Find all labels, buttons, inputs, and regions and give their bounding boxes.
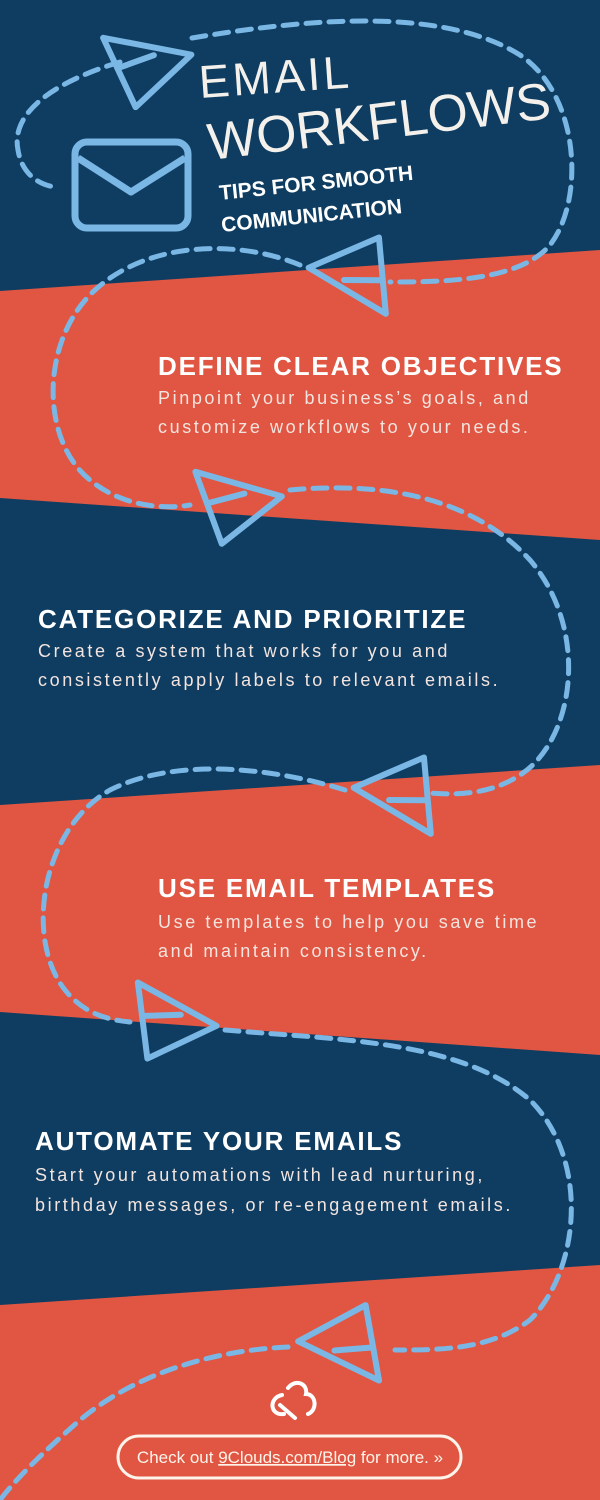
tip 1: define clear objectives: customize workflows to your needs. bbox=[158, 417, 531, 437]
tip 4: automate your emails: Start your automations with lead nurturing, bbox=[35, 1165, 485, 1185]
icon: paper plane 2 bbox=[303, 226, 399, 314]
tip 3: use email templates: USE EMAIL TEMPLATES bbox=[158, 873, 496, 903]
icon: paper plane 3 bbox=[195, 464, 286, 546]
tip 4: automate your emails: birthday messages, or re-engagement emails. bbox=[35, 1195, 513, 1215]
tip 2: categorize and prioritize: consistently apply labels to relevant emails. bbox=[38, 670, 500, 690]
subtitle bbox=[218, 162, 414, 237]
tip 1: define clear objectives: DEFINE CLEAR OBJECTIVES bbox=[158, 351, 563, 381]
tip 1: define clear objectives bbox=[158, 351, 563, 437]
footer button bbox=[118, 1436, 461, 1478]
tip 3: use email templates: and maintain consistency. bbox=[158, 941, 429, 961]
tip 2: categorize and prioritize: CATEGORIZE AND PRIORITIZE bbox=[38, 604, 467, 634]
logo bbox=[272, 1383, 315, 1418]
tip 4: automate your emails: AUTOMATE YOUR EMAILS bbox=[35, 1126, 403, 1156]
tip 2: categorize and prioritize bbox=[38, 604, 500, 690]
tip 3: use email templates: Use templates to help you save time bbox=[158, 912, 539, 932]
icon: envelope bbox=[75, 142, 188, 228]
icon: paper plane 6 bbox=[295, 1299, 386, 1381]
subtitle: COMMUNICATION bbox=[220, 195, 403, 237]
footer button: Check out 9Clouds.com/Blog for more. » bbox=[137, 1448, 443, 1467]
tip 3: use email templates bbox=[158, 873, 539, 961]
icon: paper plane 1 bbox=[103, 23, 199, 111]
title: EMAIL bbox=[197, 45, 353, 108]
subtitle: TIPS FOR SMOOTH bbox=[218, 162, 414, 205]
tip 4: automate your emails bbox=[35, 1126, 513, 1215]
tip 1: define clear objectives: Pinpoint your business’s goals, and bbox=[158, 388, 531, 408]
icon: paper plane 5 bbox=[128, 982, 221, 1067]
title: WORKFLOWS bbox=[204, 72, 554, 172]
icon: paper plane 4 bbox=[348, 746, 444, 834]
tip 2: categorize and prioritize: Create a system that works for you and bbox=[38, 641, 450, 661]
